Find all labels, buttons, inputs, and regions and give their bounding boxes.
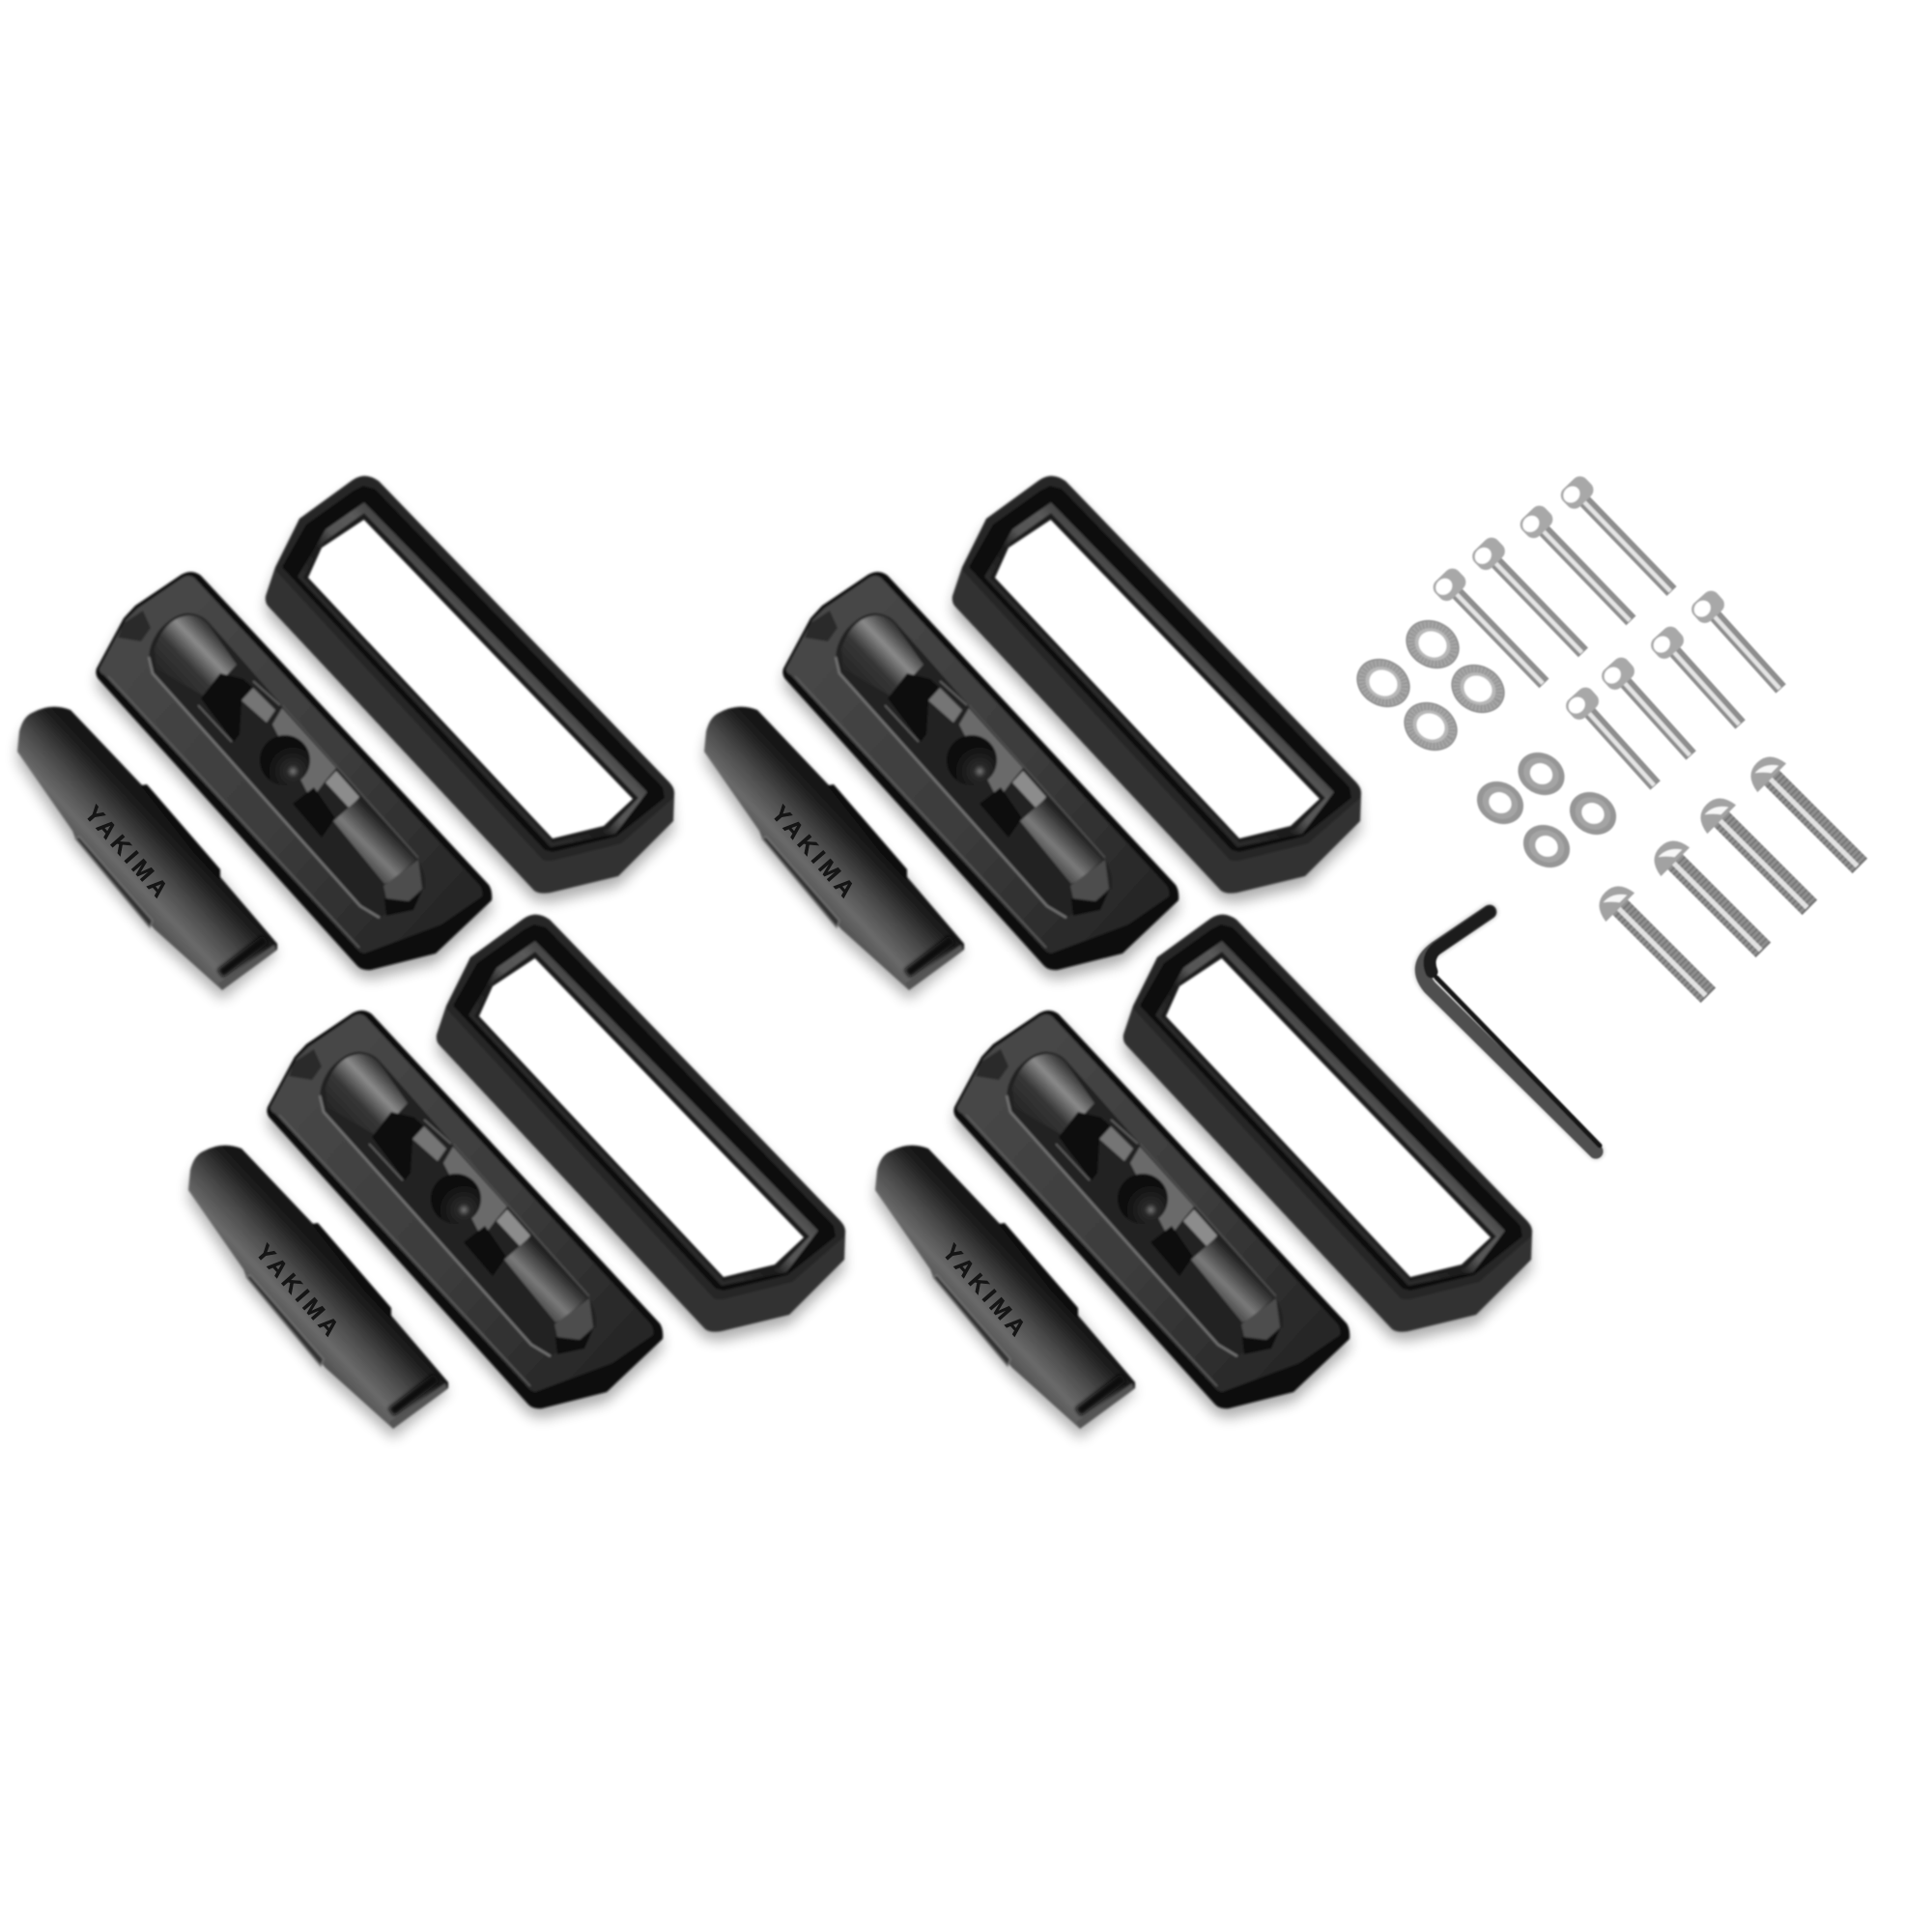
rubber gasket frame 2 bbox=[952, 476, 1361, 902]
flat washers bbox=[1469, 744, 1624, 876]
rubber gasket frame 1 bbox=[266, 476, 674, 902]
toothed lock washers bbox=[1349, 611, 1513, 759]
long socket screws bbox=[1430, 472, 1685, 696]
hex key bbox=[1422, 912, 1600, 1151]
base plate 2 bbox=[782, 572, 1179, 980]
mount set 2 (top right) bbox=[704, 476, 1361, 1000]
end cap 3 with YAKIMA logo: YAKIMA bbox=[250, 1239, 344, 1341]
base plate 1 bbox=[96, 572, 492, 980]
mount set 1 (top left) bbox=[17, 476, 674, 1000]
mount set 3 (bottom left) bbox=[188, 915, 845, 1438]
end cap 3 with YAKIMA logo bbox=[188, 1146, 448, 1438]
rubber gasket frame 3 bbox=[437, 915, 845, 1341]
end cap 1 with YAKIMA logo bbox=[17, 707, 277, 1000]
rubber gasket frame 4 bbox=[1123, 915, 1532, 1341]
base plate 4 bbox=[953, 1010, 1350, 1418]
button head bolts bbox=[1591, 749, 1876, 1011]
end cap 4 with YAKIMA logo bbox=[875, 1146, 1135, 1438]
end cap 2 with YAKIMA logo: YAKIMA bbox=[766, 801, 860, 902]
end cap 2 with YAKIMA logo bbox=[704, 707, 964, 1000]
base plate 3 bbox=[267, 1010, 663, 1418]
mount set 4 (bottom right) bbox=[875, 915, 1532, 1438]
short socket screws bbox=[1562, 587, 1795, 797]
end cap 4 with YAKIMA logo: YAKIMA bbox=[937, 1239, 1031, 1341]
end cap 1 with YAKIMA logo: YAKIMA bbox=[79, 801, 173, 902]
